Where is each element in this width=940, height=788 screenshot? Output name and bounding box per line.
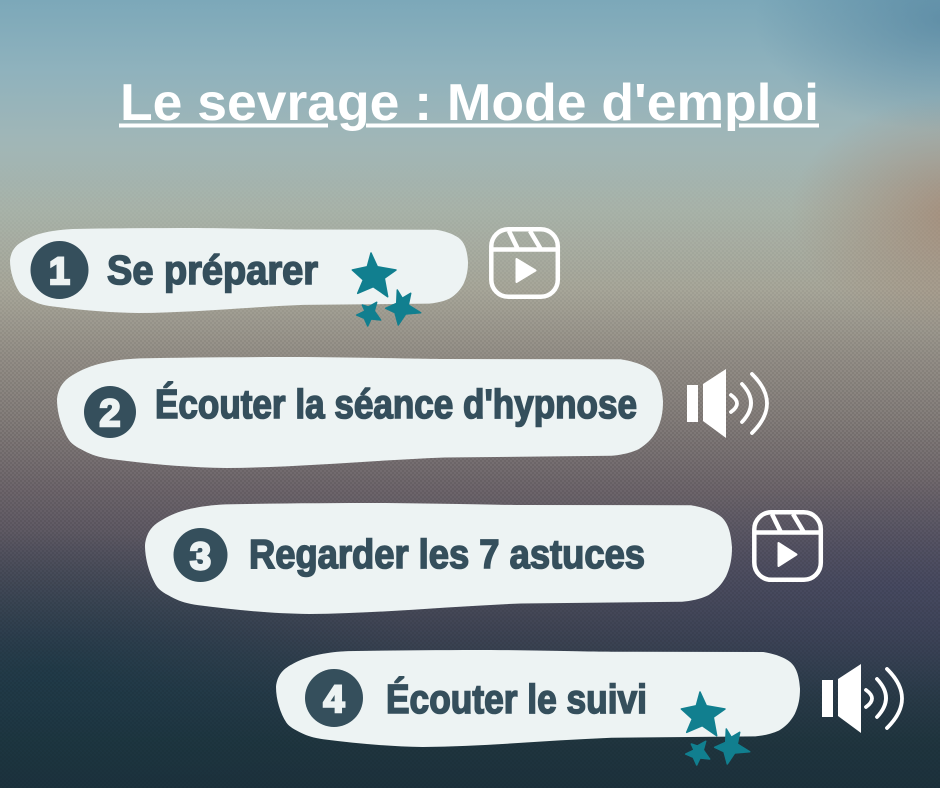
step 1 label: Se préparer [107,247,318,293]
step 4: écouter le suivi [276,650,800,747]
step 4 pill background [276,650,800,747]
step 4 number badge: 4 [323,679,345,721]
step 4 label: Écouter le suivi [386,676,647,722]
step 2 pill background [57,357,663,468]
step 3 number badge [174,528,228,582]
step 1 number badge [30,241,88,299]
icon: speaker 1 [687,369,767,438]
icon: video reel 2 [754,512,821,580]
step 3 pill background [145,503,732,614]
step 2 number badge [84,386,136,438]
step 1 pill background [10,228,468,313]
step 1 number badge: 1 [49,251,70,293]
step 2: écouter la séance d'hypnose [57,357,663,468]
step 3: regarder les 7 astuces [145,503,732,614]
step 1: se préparer [10,228,468,313]
icon: video reel 1 [491,229,558,297]
title: Le sevrage : Mode d'emploi [120,74,819,132]
step 2 label: Écouter la séance d'hypnose [155,381,637,427]
step 3 label: Regarder les 7 astuces [249,531,645,577]
step 3 number badge: 3 [190,536,211,578]
icon: speaker 2 [822,664,902,733]
step 4 number badge [305,669,363,727]
icon: stars 1 [352,253,421,326]
step 2 number badge: 2 [99,393,121,435]
icon: stars 2 [681,692,750,765]
